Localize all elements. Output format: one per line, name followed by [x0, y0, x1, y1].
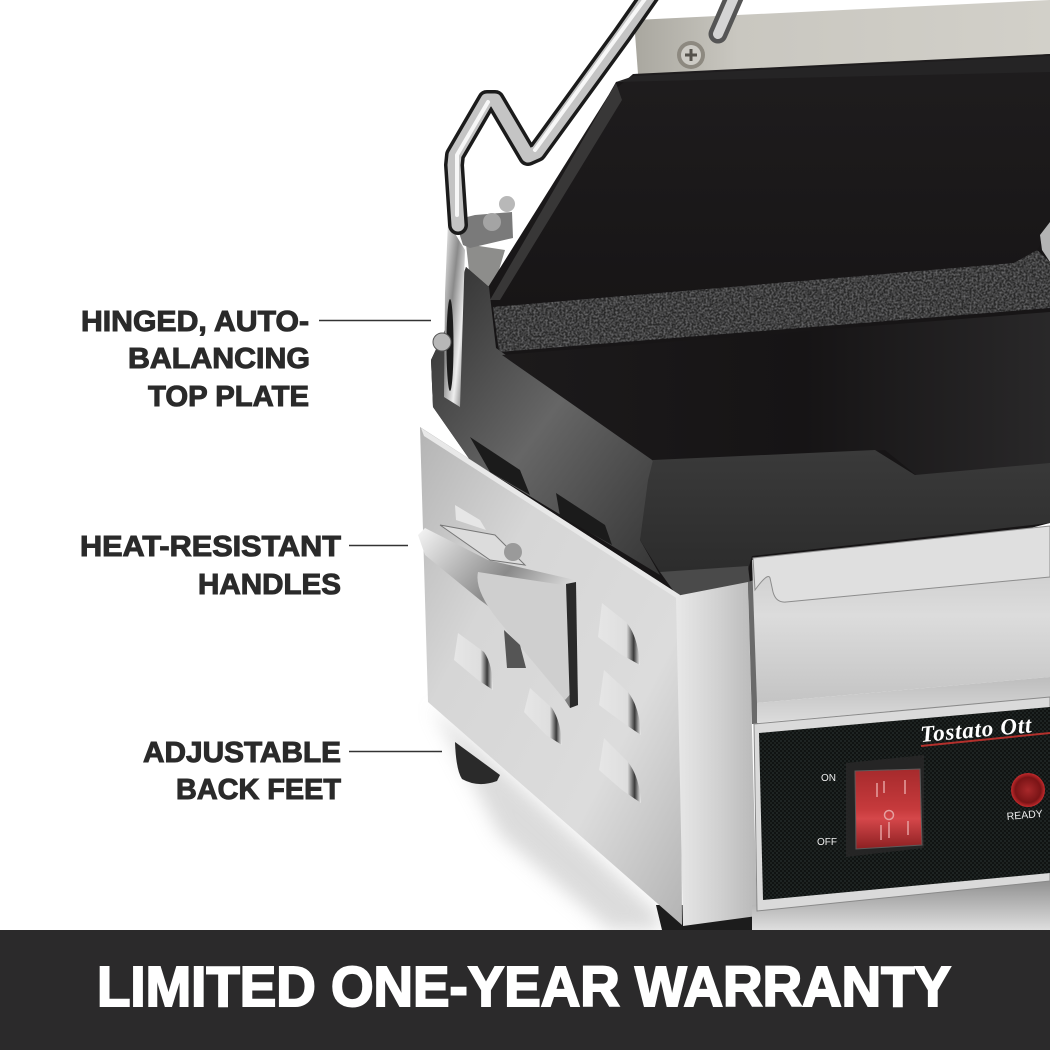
leader line	[319, 320, 431, 322]
icon: chrome side handle	[418, 525, 578, 708]
banner background	[0, 930, 1050, 1050]
vent	[598, 603, 640, 665]
label text: HANDLES	[198, 569, 341, 601]
label text: BALANCING	[128, 343, 310, 375]
leader line	[349, 544, 408, 546]
rear stainless strip	[634, 0, 1050, 74]
vent	[455, 505, 486, 530]
brand name: Tostato Ott	[919, 712, 1033, 747]
label text	[143, 737, 341, 806]
label text: ADJUSTABLE	[143, 737, 341, 769]
label text: TOP PLATE	[148, 381, 309, 413]
label text: BACK FEET	[176, 774, 341, 806]
callout: heat-resistant handles	[80, 531, 408, 601]
icon: rear foot	[455, 742, 500, 784]
side panel highlight	[421, 428, 681, 601]
icon: chrome hinge bracket	[433, 196, 515, 407]
label text: HEAT-RESISTANT	[80, 531, 341, 563]
stainless corner post	[676, 582, 757, 926]
slots in side plate	[470, 437, 530, 495]
small reflection at right of top plate	[1040, 222, 1050, 262]
ready label: READY	[1006, 808, 1043, 823]
vent	[524, 688, 562, 745]
leader line	[349, 750, 442, 752]
off label: OFF	[817, 837, 837, 848]
carbon-fibre fascia	[759, 707, 1050, 900]
front edge of lower plate	[640, 450, 1050, 572]
icon: ready light	[1011, 773, 1045, 807]
product photo: panini grill	[418, 0, 1050, 930]
top plate rim	[616, 56, 1050, 82]
icon: screw	[677, 41, 705, 69]
front lip	[753, 526, 1050, 602]
control panel frame	[754, 697, 1050, 911]
vents on side panel	[454, 505, 641, 803]
label text	[80, 531, 341, 601]
lower front band	[757, 677, 1050, 723]
dark ledge above corner post	[660, 566, 752, 600]
icon: front foot	[656, 905, 752, 930]
label text: HINGED, AUTO-	[81, 306, 309, 338]
stainless side panel	[420, 427, 682, 925]
banner text: LIMITED ONE-YEAR WARRANTY	[97, 955, 951, 1019]
callout: adjustable back feet	[143, 737, 442, 806]
ridged textured band	[493, 250, 1050, 352]
brand underline	[921, 733, 1050, 746]
icon: chrome top handle	[454, 0, 735, 225]
icon: rocker switch	[846, 755, 924, 857]
area beneath control panel	[752, 875, 1050, 930]
vent	[454, 633, 493, 690]
grey hinged side plate	[431, 267, 660, 575]
front stainless cover	[752, 528, 1050, 703]
callout: hinged top plate	[81, 306, 431, 413]
label text	[81, 306, 310, 413]
top plate, black cast surface	[480, 54, 1050, 306]
dark body silhouette behind all cast plates	[431, 54, 1050, 600]
floor shadow	[432, 705, 660, 930]
control panel	[759, 707, 1050, 900]
gap between post and cover	[748, 580, 758, 724]
on label: ON	[821, 773, 836, 784]
vent	[599, 738, 641, 803]
warranty banner	[0, 930, 1050, 1050]
lower plate, black cast surface	[502, 312, 1050, 475]
grey underlay of the hinge area	[466, 244, 505, 300]
vent	[599, 670, 641, 735]
